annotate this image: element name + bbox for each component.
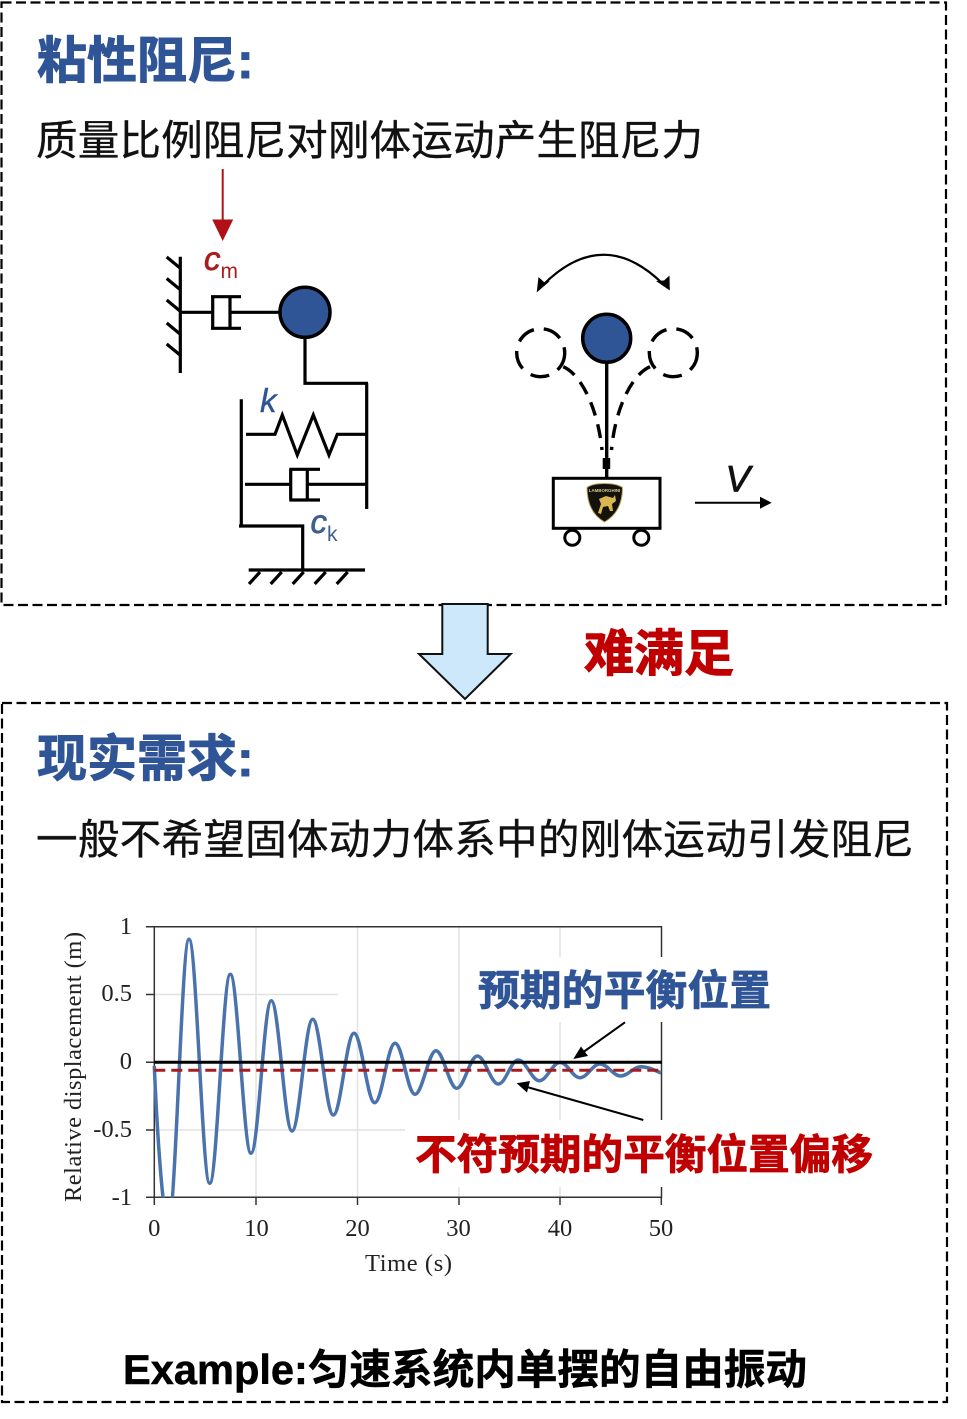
- cart wheels: [565, 530, 649, 545]
- damper cm: [180, 297, 279, 328]
- panel border: practical requirement: [2, 703, 947, 1402]
- heading: practical requirement: 现实需求:: [37, 731, 254, 787]
- label: k: k: [260, 382, 278, 419]
- spring k: [246, 415, 368, 455]
- wall with hatching: [167, 257, 180, 373]
- x axis tick labels: 30: [446, 1215, 471, 1242]
- x axis tick labels: 20: [345, 1215, 370, 1242]
- label: expected equilibrium position: 预期的平衡位置: [478, 967, 771, 1014]
- arrow: to expected equilibrium line: [573, 1022, 625, 1059]
- mass ball: [280, 287, 330, 337]
- label: velocity V: V: [726, 458, 754, 500]
- cart body: [553, 478, 660, 528]
- panel border: viscous damping: [2, 2, 946, 605]
- arrow: to offset equilibrium line: [517, 1081, 643, 1120]
- icon: shield logo: [587, 484, 622, 522]
- y axis tick labels: -1: [112, 1184, 132, 1211]
- label: cm: c: [204, 240, 221, 277]
- expected equilibrium line: [154, 1061, 662, 1064]
- label: cm: m: [220, 260, 238, 283]
- label: unexpected equilibrium offset: 不符预期的平衡位置偏移: [415, 1131, 873, 1178]
- pendulum ball: [583, 314, 631, 362]
- x axis tick labels: 10: [244, 1215, 269, 1242]
- y axis title: Relative displacement (m): [60, 932, 87, 1202]
- y axis tick labels: 0: [120, 1048, 132, 1075]
- arrow: red pointer to cm: [212, 169, 233, 241]
- arrow: hollow down arrow: [419, 604, 511, 699]
- x axis tick labels: 50: [649, 1215, 673, 1242]
- label: ck: k: [327, 523, 338, 546]
- plot frame and ticks: [146, 927, 662, 1205]
- icon: shield logo: LAMBORGHINI: [589, 488, 620, 493]
- panel: practical requirement: [2, 703, 947, 1402]
- damped oscillation curve: [154, 939, 661, 1223]
- x axis title: Time (s): [365, 1250, 452, 1277]
- x axis tick labels: 40: [548, 1215, 572, 1242]
- diagram: mass spring damper model: [167, 257, 368, 584]
- x axis tick labels: [148, 1215, 673, 1242]
- pendulum rod and pivot: [605, 362, 608, 478]
- dashed ghost pendulum positions: [517, 329, 697, 450]
- label: ck: [310, 503, 338, 546]
- offset equilibrium dashed line: [154, 1069, 662, 1072]
- label: ck: c: [310, 503, 328, 540]
- text: mass proportional damping statement: 质量比例阻尼对刚体运动产生阻尼力: [36, 117, 703, 164]
- swing arc arrow: [537, 255, 670, 292]
- heading: viscous damping: 粘性阻尼:: [37, 33, 254, 89]
- text: requirement statement: 一般不希望固体动力体系中的刚体运动引发阻尼: [36, 816, 914, 863]
- caption: example: Example:匀速系统内单摆的自由振动: [123, 1346, 807, 1393]
- y axis tick labels: 1: [120, 913, 132, 940]
- y axis tick labels: [93, 913, 132, 1211]
- panel: viscous damping: [2, 2, 946, 605]
- connection and frame: [239, 337, 368, 570]
- ground hatching: [249, 572, 348, 584]
- label masks over chart: [405, 957, 760, 1187]
- diagram: pendulum on moving cart: [517, 255, 772, 545]
- x axis tick labels: 0: [148, 1215, 160, 1242]
- grid lines: [154, 927, 560, 1197]
- damper ck: [245, 469, 367, 500]
- label: cm: [204, 240, 238, 283]
- y axis tick labels: -0.5: [93, 1116, 132, 1143]
- y axis tick labels: 0.5: [101, 980, 132, 1007]
- arrow: velocity direction: [695, 497, 772, 509]
- label: hard to satisfy: 难满足: [584, 626, 734, 682]
- line chart: relative displacement vs time: [64, 918, 672, 1276]
